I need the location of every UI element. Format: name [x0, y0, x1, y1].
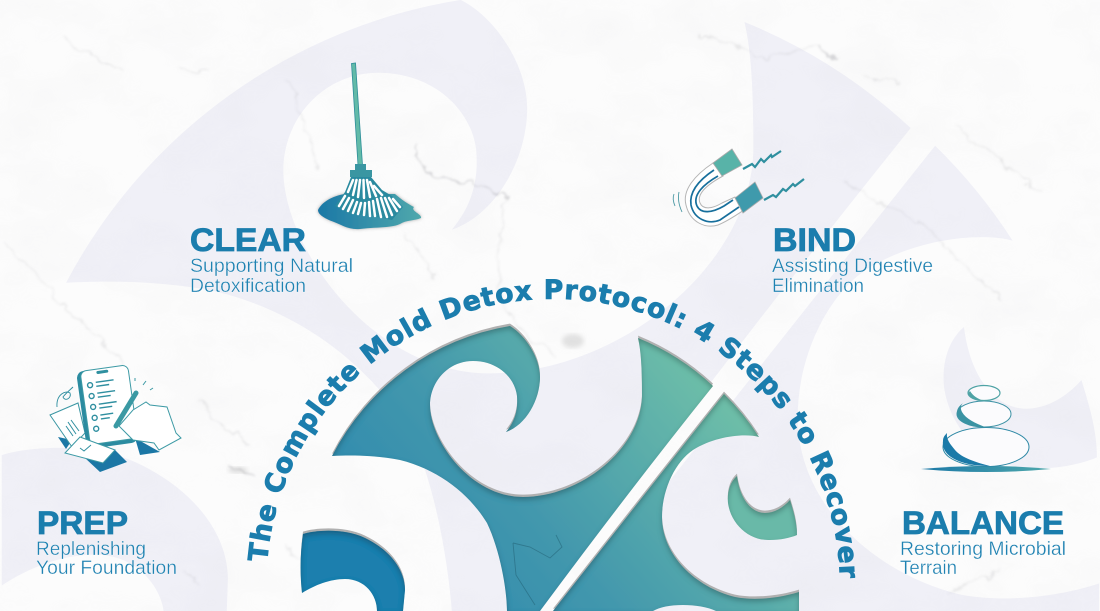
description: clear [190, 255, 353, 297]
description: bind [772, 255, 933, 297]
icon: mop [318, 63, 421, 229]
panel: prep [36, 365, 181, 579]
panel: bind [673, 149, 933, 297]
description: balance: Terrain [900, 557, 957, 579]
emblem crescent [728, 476, 797, 540]
heading: clear: CLEAR [190, 222, 306, 258]
emblem top rim [301, 324, 799, 609]
description: bind: Elimination [772, 275, 864, 297]
central emblem [301, 324, 799, 611]
emblem wave segment upper left [332, 326, 713, 611]
description: clear: Supporting Natural [190, 255, 353, 277]
icon: stacked stones [921, 386, 1051, 472]
description: prep: Your Foundation [36, 557, 177, 579]
heading: balance: BALANCE [902, 505, 1064, 541]
icon: checklist phone and hand [50, 365, 181, 472]
panel: clear [190, 63, 421, 297]
heading: prep: PREP [37, 505, 128, 541]
description: balance [900, 538, 1066, 579]
heading: bind: BIND [773, 222, 856, 258]
description: balance: Restoring Microbial [900, 538, 1066, 560]
marble smudge left [228, 467, 248, 473]
panel: balance [900, 386, 1066, 579]
description: prep: Replenishing [36, 538, 146, 560]
description: prep [36, 538, 177, 579]
description: clear: Detoxification [190, 275, 306, 297]
icon: magnet [673, 149, 804, 226]
emblem wave segment right [553, 394, 799, 611]
description: bind: Assisting Digestive [772, 255, 933, 277]
marble smudge [562, 334, 584, 348]
title: The Complete Mold Detox Protocol: 4 Steps to Recover [247, 279, 856, 578]
emblem marble veins [513, 535, 562, 605]
emblem wave segment bottom left [301, 531, 405, 611]
